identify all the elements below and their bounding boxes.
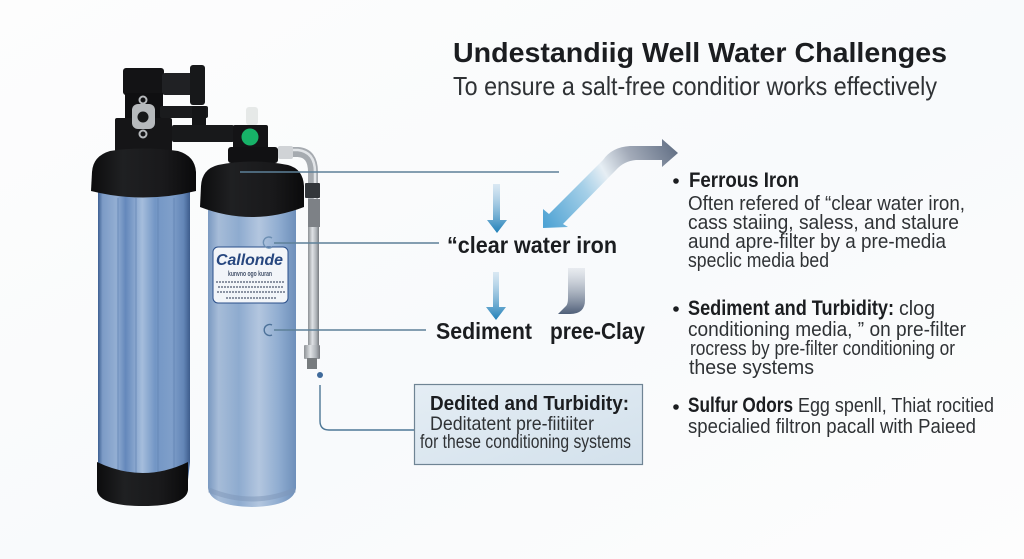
callout body: [420, 413, 631, 453]
icon: steel bypass tube: [278, 146, 320, 369]
item: ferrous iron: Ferrous Iron: [689, 169, 799, 192]
product label: [213, 247, 288, 303]
subheading: To ensure a salt-free conditior works effectively: [453, 71, 937, 101]
item: sulfur odors: Sulfur Odors: [688, 394, 793, 417]
item: ferrous iron: aund apre-filter by a pre-media: [688, 230, 947, 253]
item: sulfur odors: [673, 394, 994, 438]
item: sulfur odors: specialied filtron pacall with Paieed: [688, 415, 976, 438]
item: ferrous iron: cass staiing, saless, and stalure: [688, 211, 959, 234]
heading: Undestandiig Well Water Challenges: [453, 37, 947, 68]
arrow: large curved arrow: [543, 139, 678, 228]
item: ferrous iron: [673, 169, 965, 272]
connector lines and callout markers: [240, 172, 559, 430]
callout heading: Dedited and Turbidity:: [430, 392, 629, 415]
arrow: down to sediment: [486, 272, 506, 320]
arrow: hook to pree-clay: [558, 268, 585, 314]
callout body: for these conditioning systems: [420, 431, 631, 453]
item: sediment and turbidity: Sediment and Turbidity:: [688, 297, 894, 320]
item: sediment and turbidity: conditioning media, ” on pre-filter: [688, 318, 966, 341]
item: ferrous iron: speclic media bed: [688, 249, 829, 272]
item: sediment and turbidity: clog: [899, 297, 935, 320]
product illustration: two filter tanks: [91, 65, 320, 507]
callout body: Deditatent pre-fiitiiter: [430, 413, 594, 435]
label: pree-clay: pree-Clay: [550, 318, 645, 344]
left tank: [91, 148, 196, 506]
item: sediment and turbidity: these systems: [689, 356, 814, 379]
label: sediment: Sediment: [436, 318, 532, 344]
icon: control valve assembly: [115, 65, 278, 163]
product label: Callonde: [216, 252, 283, 269]
right tank: [200, 162, 304, 507]
arrow: down to clear water iron: [487, 184, 507, 233]
item: sulfur odors: Egg spenll, Thiat rocitied: [798, 394, 994, 417]
panel: challenges list: [673, 169, 994, 438]
item: ferrous iron: Often refered of “clear water iron,: [688, 192, 965, 215]
title block: [453, 37, 947, 101]
label: clear water iron: “clear water iron: [447, 232, 617, 258]
diagram labels: [436, 232, 645, 344]
callout box: [414, 384, 642, 464]
item: sediment and turbidity: [673, 297, 966, 379]
item: sediment and turbidity: rocress by pre-filter conditioning or: [690, 337, 955, 360]
product label: kunvno ogo kuran: [228, 271, 272, 278]
